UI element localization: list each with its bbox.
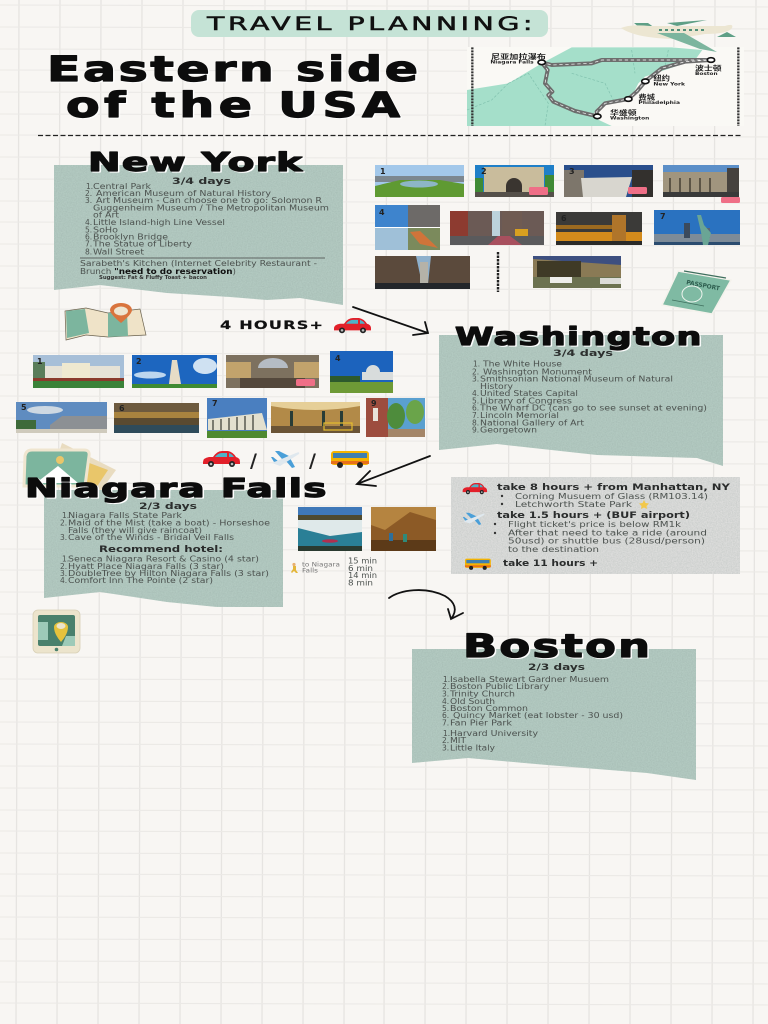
walking times: 14 min xyxy=(348,571,377,580)
Washington attractions list: 8. xyxy=(472,418,479,427)
Washington attractions list: 6. xyxy=(472,404,479,413)
Washington attractions list: History xyxy=(480,382,513,391)
Niagara attractions list: 3. xyxy=(60,533,67,542)
flight note: take 1.5 hours + (BUF airport) xyxy=(497,511,690,521)
restaurant note: Brunch "need to do reservation ) xyxy=(80,267,236,276)
photo NY 4: Little Island and Vessel collage: 4 xyxy=(379,208,385,217)
Boston attractions list: 6. xyxy=(442,711,449,720)
photo NY: The Met xyxy=(663,165,740,203)
transport options row xyxy=(203,450,369,472)
photo DC 1: White House: 1 xyxy=(37,357,43,366)
Washington attractions list: Washington Monument xyxy=(483,367,592,376)
photo DC 3: Natural History Museum xyxy=(226,355,319,388)
map city labels: Boston xyxy=(695,71,718,77)
hotel list: Hyatt Place Niagara Falls (3 star) xyxy=(68,562,224,571)
photo DC 6: The Wharf xyxy=(114,403,199,433)
Boston extra places list: 1. xyxy=(443,729,450,738)
Washington attractions list: Lincoln Memorial xyxy=(480,411,559,420)
flight note xyxy=(494,511,707,554)
panel: getting to Niagara Falls xyxy=(451,477,740,574)
dashed divider xyxy=(38,134,743,136)
label: 4 hours by car xyxy=(220,318,371,333)
photo NY 6: Brooklyn Bridge: 6 xyxy=(561,214,567,223)
walking times: 6 min xyxy=(348,564,373,573)
New York attractions list: 6. xyxy=(85,232,92,242)
Boston attractions list: 3. xyxy=(442,690,449,698)
icon: folded map with pin xyxy=(65,303,146,340)
flight note: Flight ticket's price is below RM1k xyxy=(508,520,681,529)
photo NY: Wall Street xyxy=(375,256,470,289)
walking note: to Niagara xyxy=(302,560,340,568)
photo NY 7: Statue of Liberty xyxy=(654,210,740,245)
Boston extra places list: Little Italy xyxy=(450,744,495,752)
photo NY 1: Central Park xyxy=(375,165,464,197)
Washington attractions list: Smithsonian National Museum of Natural xyxy=(480,375,673,384)
panel: New York xyxy=(54,147,343,305)
photo DC 7: Lincoln Memorial: 7 xyxy=(212,399,218,408)
Niagara attractions list: 2. xyxy=(60,518,67,528)
Boston extra places list: 3. xyxy=(442,744,449,752)
map city labels: Philadelphia xyxy=(638,100,680,106)
photo NY 2: American Museum of Natural History: 2 xyxy=(481,167,487,176)
walking note: Falls xyxy=(302,566,319,574)
photo DC 9: Georgetown: 9 xyxy=(371,399,377,408)
Washington attractions list: 3. xyxy=(472,375,479,384)
New York attractions list: Guggenheim Museum / The Metropolitan Museum xyxy=(93,204,329,212)
Boston attractions list: Quincy Market (eat lobster - 30 usd) xyxy=(453,711,623,720)
hotel list: 2. xyxy=(60,562,67,571)
icon: passport xyxy=(662,271,731,314)
Boston attractions list xyxy=(442,675,623,728)
Boston attractions list: 1. xyxy=(443,675,450,684)
hotel list: 4. xyxy=(60,576,67,585)
photo DC 6: The Wharf: 6 xyxy=(119,404,125,413)
Washington attractions list: The Wharf DC (can go to see sunset at evening) xyxy=(479,404,707,413)
Boston attractions list: Fan Pier Park xyxy=(450,718,512,728)
New York attractions list: 2. xyxy=(85,189,92,198)
duration: 2/3 days xyxy=(139,502,197,512)
hotel subheading: Recommend hotel: xyxy=(99,545,223,555)
New York attractions list: American Museum of Natural History xyxy=(96,189,271,198)
flight note: 50usd) or shuttle bus (28usd/person) xyxy=(508,536,705,546)
walking times: 15 min xyxy=(348,556,377,566)
icon: phone with map pin xyxy=(33,610,80,653)
New York attractions list xyxy=(85,182,329,256)
New York attractions list: Wall Street xyxy=(93,248,144,256)
photo DC 7: Lincoln Memorial xyxy=(207,398,267,438)
hotel list: 1. xyxy=(62,554,69,564)
photo: Sarabeth's Kitchen xyxy=(533,256,621,288)
heading: Washington: Washington xyxy=(455,323,701,352)
Boston attractions list: Isabella Stewart Gardner Musuem xyxy=(450,675,609,684)
transport options row: / xyxy=(250,450,257,472)
Boston attractions list: 2. xyxy=(442,682,449,691)
arrow: Washington to Niagara Falls xyxy=(357,456,430,486)
Washington attractions list: National Gallery of Art xyxy=(480,418,584,427)
Niagara attractions list: Maid of the Mist (take a boat) - Horseshoe xyxy=(68,518,270,528)
New York attractions list: 1. xyxy=(86,182,93,191)
walking note xyxy=(302,560,340,574)
duration: 3/4 days xyxy=(553,349,613,359)
icon: stacked photo cards xyxy=(24,443,116,492)
top label: travel planning: TRAVEL PLANNING: xyxy=(206,13,533,35)
New York attractions list: 8. xyxy=(85,248,92,256)
Boston extra places list: MIT xyxy=(450,736,466,745)
car route note: take 8 hours + from Manhattan, NY xyxy=(497,483,731,493)
flight note: After that need to take a ride (around xyxy=(508,528,707,538)
main title: Eastern side xyxy=(47,49,418,90)
Boston attractions list: Boston Common xyxy=(450,704,528,713)
map city labels xyxy=(490,52,722,121)
car route note: Corning Musuem of Glass (RM103.14) xyxy=(515,492,708,501)
photo DC 4: Capitol xyxy=(330,351,393,393)
New York attractions list: SoHo xyxy=(93,226,118,234)
photo DC 2: Washington Monument: 2 xyxy=(136,357,142,366)
photo DC 1: White House xyxy=(33,355,124,388)
arrow: New York to Washington xyxy=(353,307,428,335)
arrow: Niagara Falls to Boston xyxy=(389,590,463,619)
photo: Cave of the Winds xyxy=(371,507,436,551)
Niagara attractions list: 1. xyxy=(62,511,69,520)
map city labels: New York xyxy=(653,82,686,88)
panel: Niagara Falls xyxy=(25,473,326,607)
icon: passport: PASSPORT xyxy=(686,279,721,293)
icon: plane xyxy=(463,513,484,525)
New York attractions list: Central Park xyxy=(93,182,151,191)
photo NY 6: Brooklyn Bridge xyxy=(556,212,642,245)
map city labels: Washington xyxy=(610,115,649,121)
hotel list: 3. xyxy=(60,569,67,578)
photo DC 8: National Gallery of Art xyxy=(271,402,360,433)
label: 4 hours by car: 4 HOURS+ xyxy=(220,319,323,332)
panel: Boston xyxy=(412,628,696,780)
Boston attractions list: Trinity Church xyxy=(449,690,515,698)
car route note: Letchworth State Park xyxy=(515,500,632,509)
Boston attractions list: Old South xyxy=(450,697,495,706)
Washington attractions list: 9. xyxy=(472,426,479,435)
photo DC 2: Washington Monument xyxy=(132,355,217,388)
Washington attractions list: 1. xyxy=(473,360,480,369)
photo NY 4: Little Island and Vessel collage xyxy=(375,205,440,250)
hotel list: DoubleTree by Hilton Niagara Falls (3 star) xyxy=(68,569,269,578)
photo NY 7: Statue of Liberty: 7 xyxy=(660,212,666,221)
Niagara attractions list xyxy=(60,511,270,542)
New York attractions list: Art Museum - Can choose one to go: Solomon R xyxy=(96,196,323,205)
Boston attractions list: 4. xyxy=(442,697,449,706)
restaurant note xyxy=(80,259,317,281)
New York attractions list: of Art xyxy=(93,210,119,220)
duration: 3/4 days xyxy=(172,177,231,187)
photo DC 9: Georgetown xyxy=(366,398,425,437)
New York attractions list: 4. xyxy=(85,218,92,227)
photo NY 1: Central Park: 1 xyxy=(380,167,386,176)
photo NY 3: Guggenheim xyxy=(564,165,653,197)
photo DC 5: Library of Congress: 5 xyxy=(21,403,27,412)
photo: Niagara Falls xyxy=(298,507,362,551)
bus note: take 11 hours + xyxy=(503,559,598,569)
Niagara attractions list: Cave of the Winds - Bridal Veil Falls xyxy=(68,533,234,542)
map city labels: 纽约 xyxy=(653,74,670,83)
walking times: 8 min xyxy=(348,578,373,588)
Boston attractions list: 5. xyxy=(442,704,449,713)
icon: airplane xyxy=(621,20,736,52)
main title: of the USA xyxy=(66,85,400,126)
heading: Boston: Boston xyxy=(463,628,650,665)
Washington attractions list: 7. xyxy=(472,411,479,420)
map city labels: 费城 xyxy=(638,92,655,101)
Boston extra places list: Harvard University xyxy=(450,729,538,738)
Boston extra places list xyxy=(442,729,538,752)
map stop markers xyxy=(538,58,715,119)
New York attractions list: Little Island-high Line Vessel xyxy=(93,218,225,227)
Washington attractions list: Georgetown xyxy=(480,426,537,435)
car route note xyxy=(497,483,731,509)
New York attractions list: 5. xyxy=(85,226,92,234)
duration: 2/3 days xyxy=(528,663,585,673)
hotel list xyxy=(60,554,269,585)
icon: runner xyxy=(291,563,298,573)
restaurant note: Sarabeth's Kitchen (Internet Celebrity Restaurant - xyxy=(80,259,317,268)
heading: New York: New York xyxy=(88,147,303,177)
photo NY 3: Guggenheim: 3 xyxy=(569,167,575,176)
main title xyxy=(47,49,418,126)
icon: bus xyxy=(465,559,491,570)
panel: Washington xyxy=(439,323,723,466)
photo DC 5: Library of Congress xyxy=(16,402,107,433)
Washington attractions list: 4. xyxy=(472,389,479,398)
photo NY 2: American Museum of Natural History xyxy=(475,165,554,197)
Niagara attractions list: Niagara Falls State Park xyxy=(68,511,182,520)
flight note: to the destination xyxy=(508,545,599,554)
Boston attractions list: 7. xyxy=(442,718,449,728)
photo DC 4: Capitol: 4 xyxy=(335,354,341,363)
route map xyxy=(467,47,744,126)
Washington attractions list: 5. xyxy=(472,397,479,406)
dotted separator xyxy=(497,252,499,292)
Washington attractions list: United States Capital xyxy=(480,389,578,398)
New York attractions list: Brooklyn Bridge xyxy=(93,232,168,242)
map city labels: Niagara Falls xyxy=(490,59,534,65)
New York attractions list: 3. xyxy=(85,196,92,205)
Niagara attractions list: Falls (they will give raincoat) xyxy=(68,526,202,535)
icon: car xyxy=(463,483,487,494)
photo NY 5: SoHo xyxy=(450,211,544,245)
Washington attractions list: The White House xyxy=(482,360,562,369)
walking times xyxy=(348,556,377,588)
hotel list: Comfort Inn The Pointe (2 star) xyxy=(68,576,213,585)
Boston attractions list: Boston Public Library xyxy=(450,682,549,691)
New York attractions list: 7. xyxy=(85,240,92,248)
Boston extra places list: 2. xyxy=(442,736,449,745)
transport options row: / xyxy=(309,450,316,472)
map city labels: 华盛顿 xyxy=(610,108,637,117)
Washington attractions list xyxy=(472,360,707,435)
restaurant note: Suggest: Fat & Fluffy Toast + bacon xyxy=(99,275,208,281)
map city labels: 尼亚加拉瀑布 xyxy=(491,52,546,61)
hotel list: Seneca Niagara Resort & Casino (4 star) xyxy=(68,554,259,564)
Washington attractions list: 2. xyxy=(472,367,479,376)
map city labels: 波士顿 xyxy=(695,64,722,73)
Washington attractions list: Library of Congress xyxy=(480,397,572,406)
heading: Niagara Falls: Niagara Falls xyxy=(25,473,326,503)
New York attractions list: The Statue of Liberty xyxy=(92,240,192,248)
